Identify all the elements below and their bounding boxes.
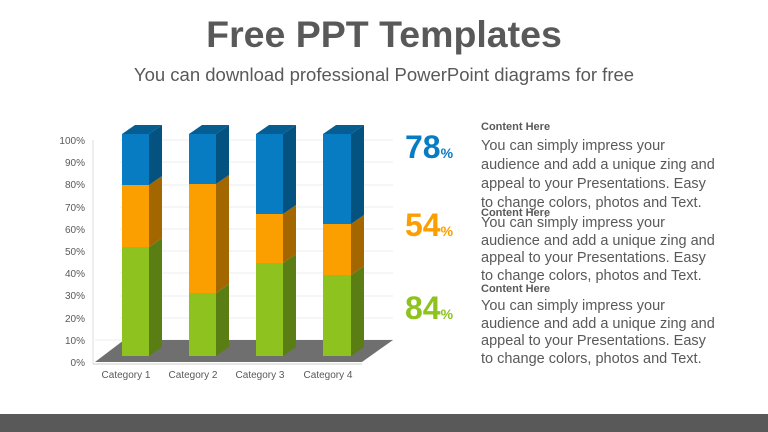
bar 3 bbox=[256, 125, 296, 356]
text 3: You can simply impress your audience and add a unique zing and appeal to your Presentations. Easy to change colors, photos and Text. bbox=[481, 298, 715, 366]
title: Free PPT Templates bbox=[206, 13, 562, 55]
axis labels: 10% bbox=[65, 336, 85, 347]
bar 1 bbox=[122, 125, 162, 356]
text 2: You can simply impress your audience and add a unique zing and appeal to your Presentations. Easy to change colors, photos and Text. bbox=[481, 215, 715, 284]
axis labels: 90% bbox=[65, 158, 85, 169]
bar 4 bbox=[323, 125, 364, 356]
footer bar bbox=[0, 414, 768, 432]
chart: 3D stacked bar chart bbox=[59, 125, 393, 381]
category labels bbox=[102, 370, 353, 381]
bar 2 bbox=[189, 125, 229, 356]
axis labels: 40% bbox=[65, 269, 85, 280]
axis labels: 100% bbox=[59, 136, 85, 147]
axis labels: 20% bbox=[65, 314, 85, 325]
floor bbox=[95, 340, 393, 362]
heading 2: Content Here bbox=[481, 206, 550, 218]
axis labels: 0% bbox=[71, 358, 85, 369]
heading 3: Content Here bbox=[481, 282, 550, 294]
axis labels bbox=[59, 136, 85, 369]
number: 78%: 78% bbox=[405, 129, 453, 165]
axis labels: 60% bbox=[65, 225, 85, 236]
number: 84%: 84% bbox=[405, 290, 453, 326]
axis labels: 50% bbox=[65, 247, 85, 258]
number: 54%: 54% bbox=[405, 207, 453, 243]
axis labels: 70% bbox=[65, 203, 85, 214]
category labels: Category 4 bbox=[304, 370, 353, 381]
subtitle: You can download professional PowerPoint diagrams for free bbox=[134, 64, 634, 85]
axis labels: 80% bbox=[65, 180, 85, 191]
category labels: Category 2 bbox=[169, 370, 218, 381]
text 1: You can simply impress your audience and add a unique zing and appeal to your Presentations. Easy to change colors, photos and Text. bbox=[481, 138, 715, 210]
heading 1: Content Here bbox=[481, 121, 550, 133]
axis labels: 30% bbox=[65, 291, 85, 302]
category labels: Category 1 bbox=[102, 370, 151, 381]
category labels: Category 3 bbox=[236, 370, 285, 381]
